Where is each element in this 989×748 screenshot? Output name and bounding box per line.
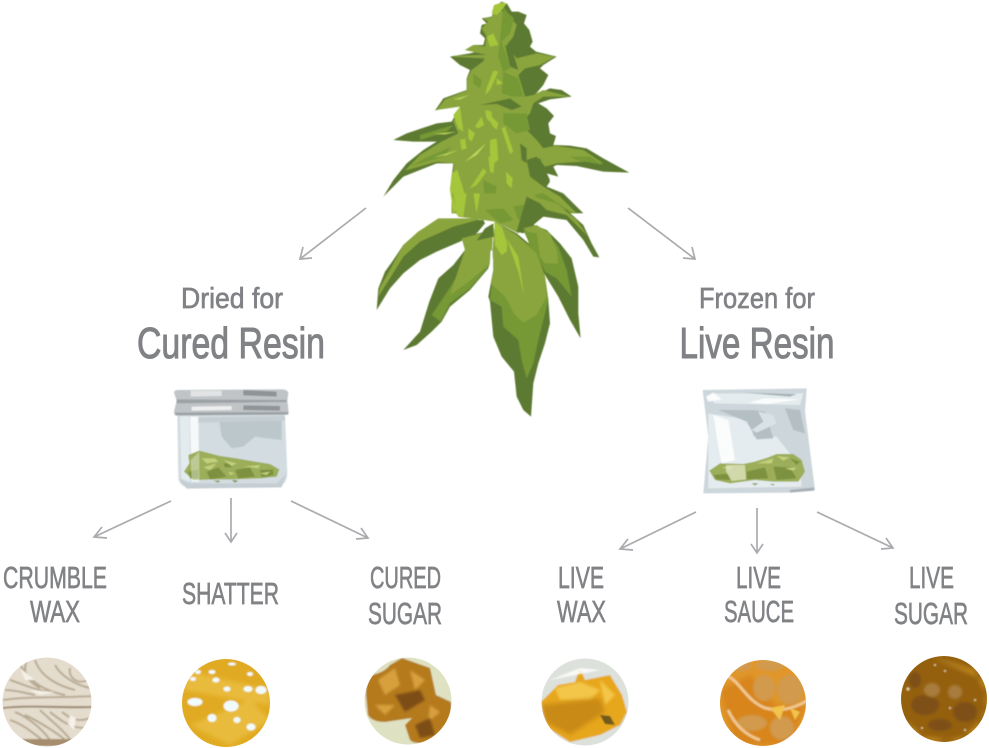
arrow: plant to cured resin — [300, 208, 366, 259]
label: live wax: WAX — [557, 594, 606, 629]
heading: dried for cured resin: Dried for — [181, 283, 283, 315]
label: live sugar: LIVE — [909, 560, 954, 595]
heading: frozen for live resin: Frozen for — [699, 283, 815, 315]
arrow: jar to crumble wax — [94, 501, 171, 538]
photo: live wax — [542, 658, 628, 746]
plant upper bud — [383, 2, 629, 213]
icon: plastic bag with frozen buds — [703, 388, 815, 493]
arrow: jar to shatter — [225, 498, 237, 542]
heading: dried for cured resin — [137, 283, 325, 368]
plant lower fan leaves — [377, 193, 599, 417]
photo: live sugar — [901, 656, 987, 742]
photo: crumble wax — [2, 658, 92, 746]
label: live sauce: LIVE — [736, 560, 781, 595]
label: live wax — [557, 560, 606, 629]
arrow: bag to live wax — [620, 512, 696, 550]
arrow: bag to live sauce — [751, 508, 763, 553]
label: crumble wax: CRUMBLE — [3, 560, 107, 595]
label: shatter: SHATTER — [182, 576, 279, 611]
photo: shatter — [182, 659, 270, 747]
heading: dried for cured resin: Cured Resin — [137, 319, 325, 368]
arrow: bag to live sugar — [817, 512, 893, 549]
heading: frozen for live resin: Live Resin — [680, 319, 834, 368]
cannabis plant illustration — [377, 2, 629, 417]
label: cured sugar: CURED — [370, 560, 441, 595]
label: live sauce: SAUCE — [724, 594, 794, 629]
heading: frozen for live resin — [680, 283, 834, 368]
label: live sugar — [894, 560, 968, 631]
arrow: jar to cured sugar — [291, 501, 368, 539]
label: crumble wax — [3, 560, 107, 629]
label: live wax: LIVE — [558, 560, 604, 595]
photo: cured sugar — [364, 658, 452, 744]
label: cured sugar — [368, 560, 442, 631]
label: crumble wax: WAX — [30, 594, 80, 629]
label: live sauce — [724, 560, 794, 629]
label: cured sugar: SUGAR — [368, 596, 442, 631]
icon: glass jar with dried buds — [174, 389, 289, 489]
arrow: plant to live resin — [628, 208, 695, 259]
photo: live sauce — [718, 658, 808, 748]
